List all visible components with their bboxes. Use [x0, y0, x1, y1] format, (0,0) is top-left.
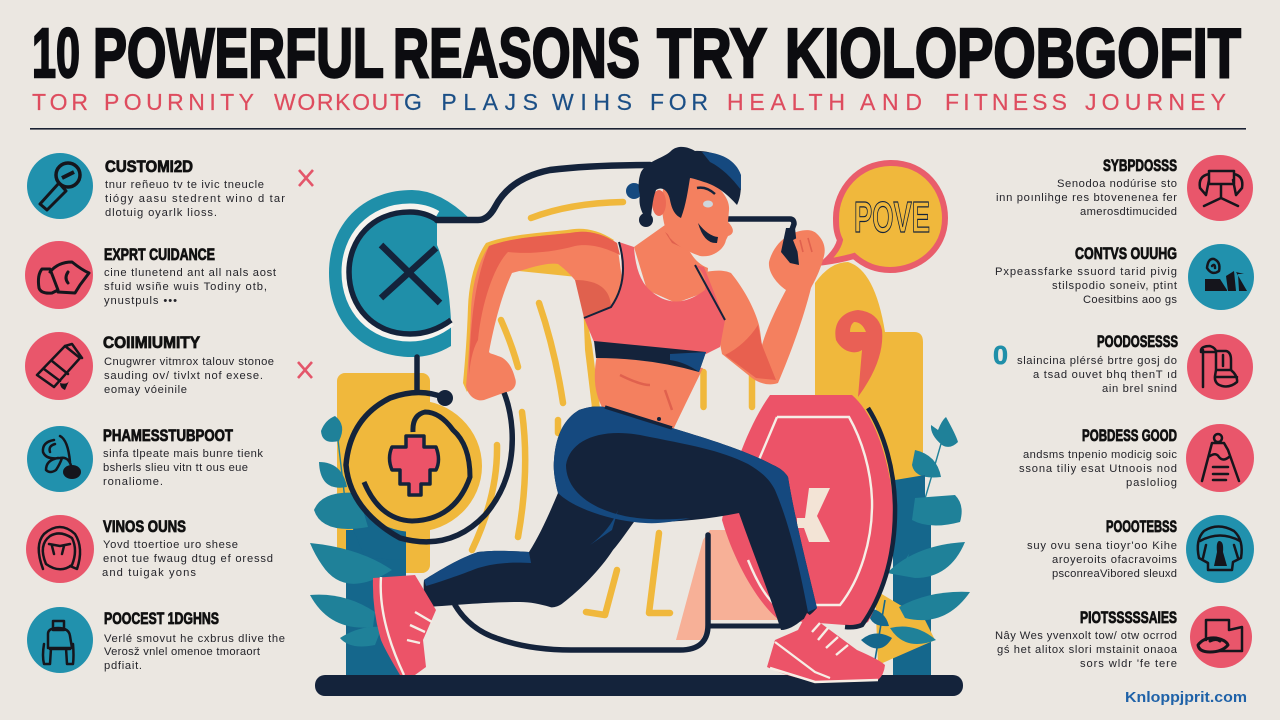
- left column item 2: cine tlunetend ant all nals aost: [104, 267, 277, 279]
- right column item 5: POOOTEBSS: [1106, 518, 1177, 536]
- left column item 5: and tuigak yons: [102, 567, 196, 579]
- title: REASONS: [393, 14, 640, 92]
- subtitle: WIHS: [552, 89, 632, 115]
- chest band: [594, 341, 706, 372]
- left column item 6: POOCEST 1DGHNS: [104, 610, 219, 628]
- right column item 6: [995, 606, 1252, 670]
- left column item 4: PHAMESSTUBPOOT: [103, 427, 233, 445]
- left column item 6: Verlé smovut he cxbrus dlive the: [104, 633, 285, 645]
- hair and cap: [626, 183, 642, 199]
- speech bubble: POVE: [854, 193, 930, 242]
- right column item 3: a tsad ouvet bhq thenT ıd: [1033, 369, 1177, 381]
- red x mark top: [299, 170, 313, 186]
- yellow motion dashes: [472, 202, 752, 615]
- right column item 3: [1017, 333, 1253, 400]
- central illustration: [310, 147, 970, 696]
- icon: fist: [25, 241, 93, 309]
- left column item 1: CUSTOMI2D: [105, 158, 193, 176]
- right column item 2: CONTVS OUUHG: [1075, 245, 1177, 263]
- subtitle: WORKOUT: [274, 89, 404, 115]
- right column item 4: ssona tiliy esat Utnoois nod: [1019, 463, 1177, 475]
- right column item 6: Nây Wes yvenxolt tow/ otw ocrrod: [995, 630, 1177, 642]
- leggings: [424, 406, 817, 630]
- left column item 4: sinfa tlpeate mais bunre tienk: [103, 448, 263, 460]
- left column item 6: pdfiait.: [104, 660, 142, 672]
- left column item 3: sauding ov/ tivlxt nof exese.: [104, 370, 263, 382]
- left column item 6: Verosž vnlel omenoe tmoraort: [104, 646, 261, 658]
- icon: stethoscope knot: [27, 426, 93, 492]
- left column item 1: [27, 153, 285, 219]
- title: [32, 14, 1241, 92]
- left column item 6: [27, 607, 285, 673]
- connector lines: [417, 165, 794, 650]
- belly: [595, 355, 703, 432]
- left column item 1: tiógy aasu stedrent wino d tar: [105, 193, 285, 205]
- left column item 4: bsherls slieu vitn tt ous eue: [103, 462, 248, 474]
- subtitle: TOR: [32, 89, 88, 115]
- phone: [781, 228, 799, 265]
- subtitle: AND: [860, 89, 922, 115]
- left plant: [310, 416, 405, 646]
- icon: red skull cross: [390, 436, 438, 495]
- right plant: [861, 417, 970, 660]
- icon: backpack: [27, 607, 93, 673]
- right column item 3: slaincina plérsé brtre gosj do: [1017, 355, 1177, 367]
- icon: bench: [1187, 155, 1253, 221]
- right column item 3: ain brel snind: [1102, 383, 1177, 395]
- right column item 4: [1019, 424, 1254, 492]
- yellow circle with face cross: [346, 378, 512, 542]
- title: TRY: [657, 14, 767, 92]
- back shoe: [373, 575, 436, 675]
- left column item 3: [25, 332, 274, 400]
- left column item 2: ynustpuls •••: [104, 295, 177, 307]
- ground bar: [315, 675, 963, 696]
- right column item 1: Senodoa nodúrise sto: [1057, 178, 1177, 190]
- right column item 4: POBDESS GOOD: [1082, 427, 1177, 445]
- left column item 5: VINOS OUNS: [103, 518, 186, 536]
- left column item 3: COIIMIUMITY: [103, 334, 200, 352]
- front arm: [706, 230, 825, 384]
- left column item 2: [25, 241, 277, 309]
- right column item 6: gś het alitox slori mstainit onaoa: [997, 644, 1178, 656]
- subtitle: JOURNEY: [1085, 89, 1226, 115]
- head: [662, 177, 733, 256]
- icon: grouped figures: [1188, 244, 1254, 310]
- left column item 5: Yovd ttoertioe uro shese: [103, 539, 238, 551]
- subtitle: POURNITY: [104, 89, 254, 115]
- subtitle: [32, 89, 1226, 115]
- pink sports top: [584, 242, 725, 354]
- red weight plate: [722, 395, 895, 627]
- left column item 4: ronaliome.: [103, 476, 163, 488]
- icon: magnifier: [27, 153, 93, 219]
- right column item 5: psconreaVibored sleuxd: [1052, 568, 1177, 580]
- red x mark lower: [298, 362, 312, 378]
- right column item 6: PIOTSSSSSAIES: [1080, 609, 1177, 627]
- neck: [634, 225, 708, 303]
- right column item 3: POODOSESSS: [1097, 333, 1178, 351]
- icon: box and bean: [1190, 606, 1252, 668]
- subtitle: HEALTH: [727, 89, 845, 115]
- title: 10: [32, 14, 80, 92]
- right column item 4: pasloliog: [1126, 477, 1177, 489]
- right column item 2: Pxpeassfarke ssuord tarid pivig: [995, 266, 1177, 278]
- icon: face with glasses: [26, 515, 94, 583]
- right column item 5: suy ovu sena tioyr'oo Kihe: [1027, 540, 1177, 552]
- left column item 1: dlotuig oyarlk lioss.: [105, 207, 217, 219]
- right column item 1: inn poınlihge res btovenenea fer: [996, 192, 1177, 204]
- right column item 5: [1027, 515, 1254, 583]
- subtitle: FOR: [650, 89, 708, 115]
- icon: bandage roll: [25, 332, 93, 400]
- back arm: [466, 232, 625, 400]
- left column item 1: tnur reñeuo tv te ivic tneucle: [105, 179, 264, 191]
- icon: lamp and weight: [1187, 334, 1253, 400]
- left column item 2: EXPRT CUIDANCE: [104, 246, 215, 264]
- title: POWERFUL: [93, 14, 384, 92]
- speech bubble: [825, 163, 945, 270]
- left column item 5: [26, 515, 273, 583]
- subtitle: FITNESS: [945, 89, 1067, 115]
- red numeral glyph: [835, 310, 882, 397]
- right column item 1: amerosdtimucided: [1080, 206, 1177, 218]
- teal target circle with cross: [329, 190, 470, 357]
- right column item 1: [996, 155, 1253, 221]
- left column item 2: sfuid wsiñe wuis Todiny otb,: [104, 281, 267, 293]
- right column item 6: sors wldr 'fe tere: [1080, 658, 1177, 670]
- teal zero mark: 0: [993, 340, 1008, 370]
- icon: climber figure: [1186, 424, 1254, 492]
- left column item 5: enot tue fwaug dtug ef oressd: [103, 553, 273, 565]
- left column item 4: [27, 426, 263, 492]
- yellow arm outline: [463, 229, 614, 392]
- right column item 4: andsms tnpenio modicig soic: [1023, 449, 1177, 461]
- right column item 2: Coesitbins aoo gs: [1083, 294, 1177, 306]
- right column item 2: [995, 244, 1254, 310]
- right column item 5: aroyeroits ofacravoims: [1052, 554, 1177, 566]
- left column item 3: eomay vóeinile: [104, 384, 187, 396]
- footer url: Knloppjprit.com: [1125, 689, 1247, 706]
- subtitle: G PLAJS: [404, 89, 538, 115]
- icon: head with headphones: [1186, 515, 1254, 583]
- background blocks: [337, 262, 935, 675]
- right column item 2: stilspodio soneiv, ptint: [1052, 280, 1178, 292]
- front shoe: [767, 613, 885, 682]
- left column item 3: Cnugwrer vitmrox talouv stonoe: [104, 356, 274, 368]
- right column item 1: SYBPDOSSS: [1103, 157, 1177, 175]
- athlete figure: [373, 147, 825, 675]
- letter K on plate: [797, 488, 830, 542]
